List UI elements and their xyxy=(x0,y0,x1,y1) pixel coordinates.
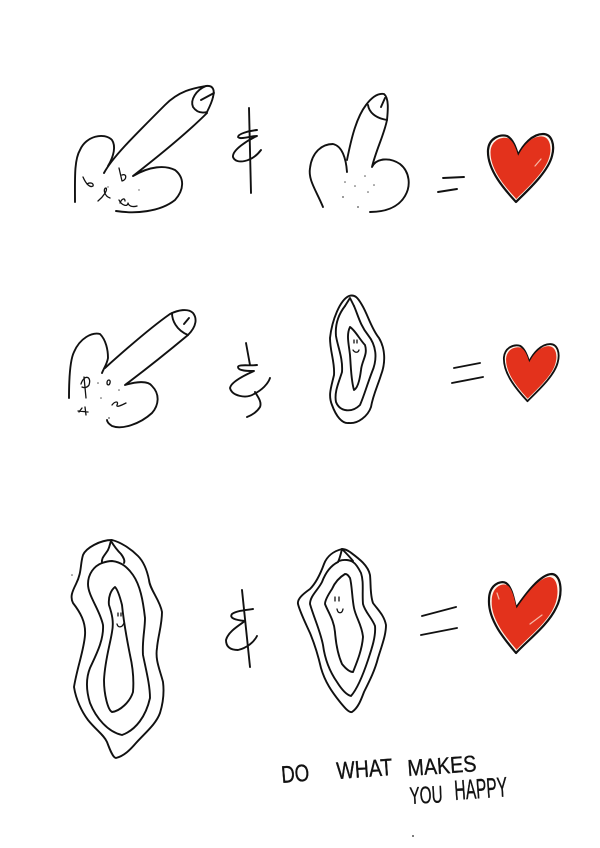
row 2: first doodle xyxy=(69,310,196,427)
caption: do what makes you happy: YOU xyxy=(409,781,443,810)
caption: do what makes you happy xyxy=(280,750,508,810)
row 1: heart xyxy=(488,134,553,202)
row 3: ampersand xyxy=(226,590,257,667)
row 1: equals sign xyxy=(438,177,464,192)
stray ink dot xyxy=(412,835,414,837)
row 3: equals sign xyxy=(421,607,457,635)
caption: do what makes you happy: WHAT xyxy=(336,754,394,785)
caption: do what makes you happy: MAKES xyxy=(407,750,477,781)
row 3: large contour drawing xyxy=(71,540,164,758)
row 3: second contour drawing xyxy=(298,549,386,712)
row 1: ampersand xyxy=(233,108,261,193)
row 2: contour drawing xyxy=(330,295,384,423)
row 1: first doodle xyxy=(75,86,214,212)
caption: do what makes you happy: HAPPY xyxy=(453,771,508,806)
row 2: ampersand xyxy=(230,343,270,417)
row 3: heart xyxy=(489,574,561,653)
row 1: second doodle xyxy=(310,94,409,212)
row 2: heart xyxy=(504,344,559,401)
row 2: equals sign xyxy=(452,363,483,383)
caption: do what makes you happy: DO xyxy=(280,760,310,789)
